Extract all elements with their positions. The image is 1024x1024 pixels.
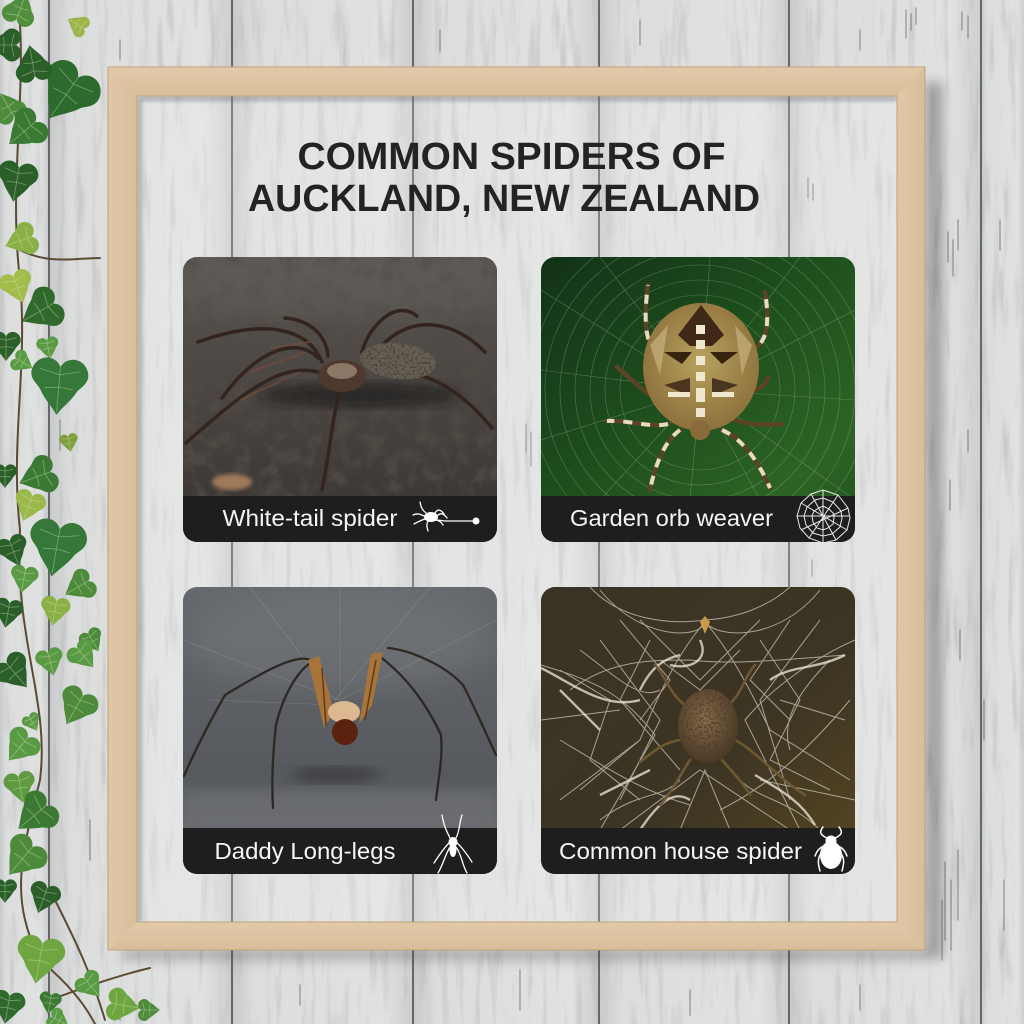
title (248, 136, 760, 220)
icon: spider web (797, 490, 850, 543)
panel: garden orb weaver (541, 257, 855, 542)
title: COMMON SPIDERS OF (298, 136, 726, 178)
panel: white-tail spider (183, 257, 497, 542)
caption bar (541, 828, 855, 874)
caption: Garden orb weaver (570, 505, 773, 531)
wooden frame (108, 67, 925, 950)
icon: solid house spider (815, 827, 847, 871)
caption: White-tail spider (222, 505, 398, 531)
photo: orb weaver in web on green (541, 257, 855, 542)
caption bar (183, 496, 497, 542)
icon: long-legged spider (434, 815, 472, 873)
icon: white-tail spider with tail (413, 502, 480, 531)
photo: daddy long-legs on grey (183, 587, 497, 874)
caption: Common house spider (559, 838, 802, 864)
ivy vine (0, 0, 160, 1024)
caption bar (183, 828, 497, 874)
caption bar (541, 496, 855, 542)
panel: daddy long-legs (183, 587, 497, 874)
caption: Daddy Long-legs (214, 838, 396, 864)
title: AUCKLAND, NEW ZEALAND (248, 178, 760, 220)
panel: common house spider (541, 587, 855, 874)
photo: house spider in tangled web (541, 587, 855, 874)
frame shadow (122, 82, 943, 959)
photo: spider on rock (183, 257, 497, 542)
